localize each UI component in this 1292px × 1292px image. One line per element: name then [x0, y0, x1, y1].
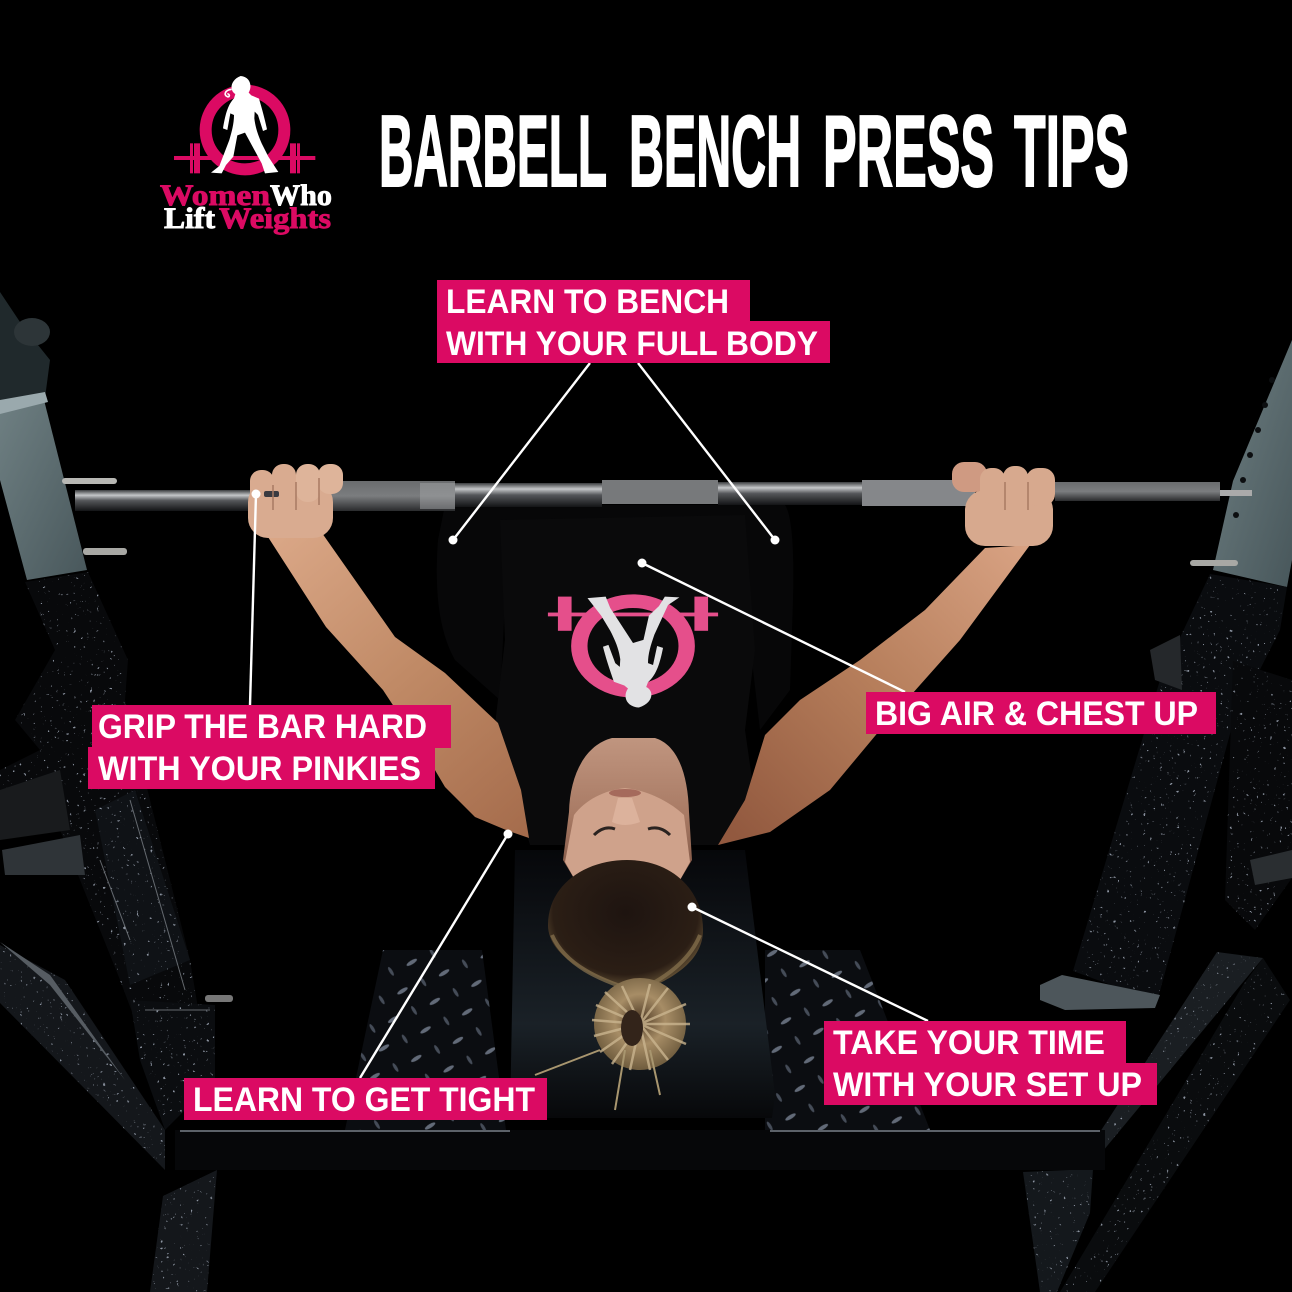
callout: learn to get tight: LEARN TO GET TIGHT — [193, 1081, 535, 1119]
callout: learn to bench with your full body: LEARN TO BENCH — [446, 283, 729, 321]
photo: barbell — [75, 480, 1252, 511]
callout: grip the bar hard with your pinkies: GRIP THE BAR HARD — [98, 708, 427, 746]
photo: back and shirt — [437, 505, 793, 845]
title: BENCH — [629, 96, 801, 208]
title: TIPS — [1014, 96, 1129, 208]
logo: Women Who Lift Weights — [160, 76, 332, 235]
photo: squat rack left — [0, 292, 233, 1292]
logo: Women Who Lift Weights: Who — [270, 179, 332, 212]
callout: big air and chest up — [638, 558, 1216, 734]
photo: left hand — [248, 464, 343, 538]
callout: grip the bar hard with your pinkies: WITH YOUR PINKIES — [98, 750, 421, 788]
callout: take your time with your set up: TAKE YOUR TIME — [833, 1024, 1105, 1062]
callout: grip the bar hard with your pinkies — [88, 490, 451, 789]
callout: take your time with your set up: WITH YOUR SET UP — [833, 1066, 1142, 1104]
callout: learn to bench with your full body: WITH YOUR FULL BODY — [446, 325, 818, 363]
photo: hair and bun — [535, 860, 703, 1110]
photo: squat rack right — [1023, 340, 1292, 1292]
logo: Women Who Lift Weights: Lift — [164, 202, 215, 235]
photo: left arm — [268, 533, 529, 838]
title — [379, 96, 1129, 208]
photo: right arm — [718, 545, 1030, 845]
photo: chest, neck and face — [563, 738, 692, 880]
logo: Women Who Lift Weights: Weights — [219, 202, 331, 235]
callout: learn to bench with your full body — [437, 280, 830, 544]
callout: big air and chest up: BIG AIR & CHEST UP — [875, 695, 1198, 733]
callout: learn to get tight — [184, 830, 547, 1120]
photo: bench pad — [510, 850, 775, 1118]
photo: shirt logo — [548, 597, 718, 708]
title: BARBELL — [379, 96, 607, 208]
callout: take your time with your set up — [688, 902, 1157, 1105]
photo: bench base and tread plates — [175, 950, 1105, 1170]
photo: right hand — [952, 462, 1055, 546]
title: PRESS — [823, 96, 994, 208]
logo: Women Who Lift Weights: Women — [160, 179, 270, 212]
